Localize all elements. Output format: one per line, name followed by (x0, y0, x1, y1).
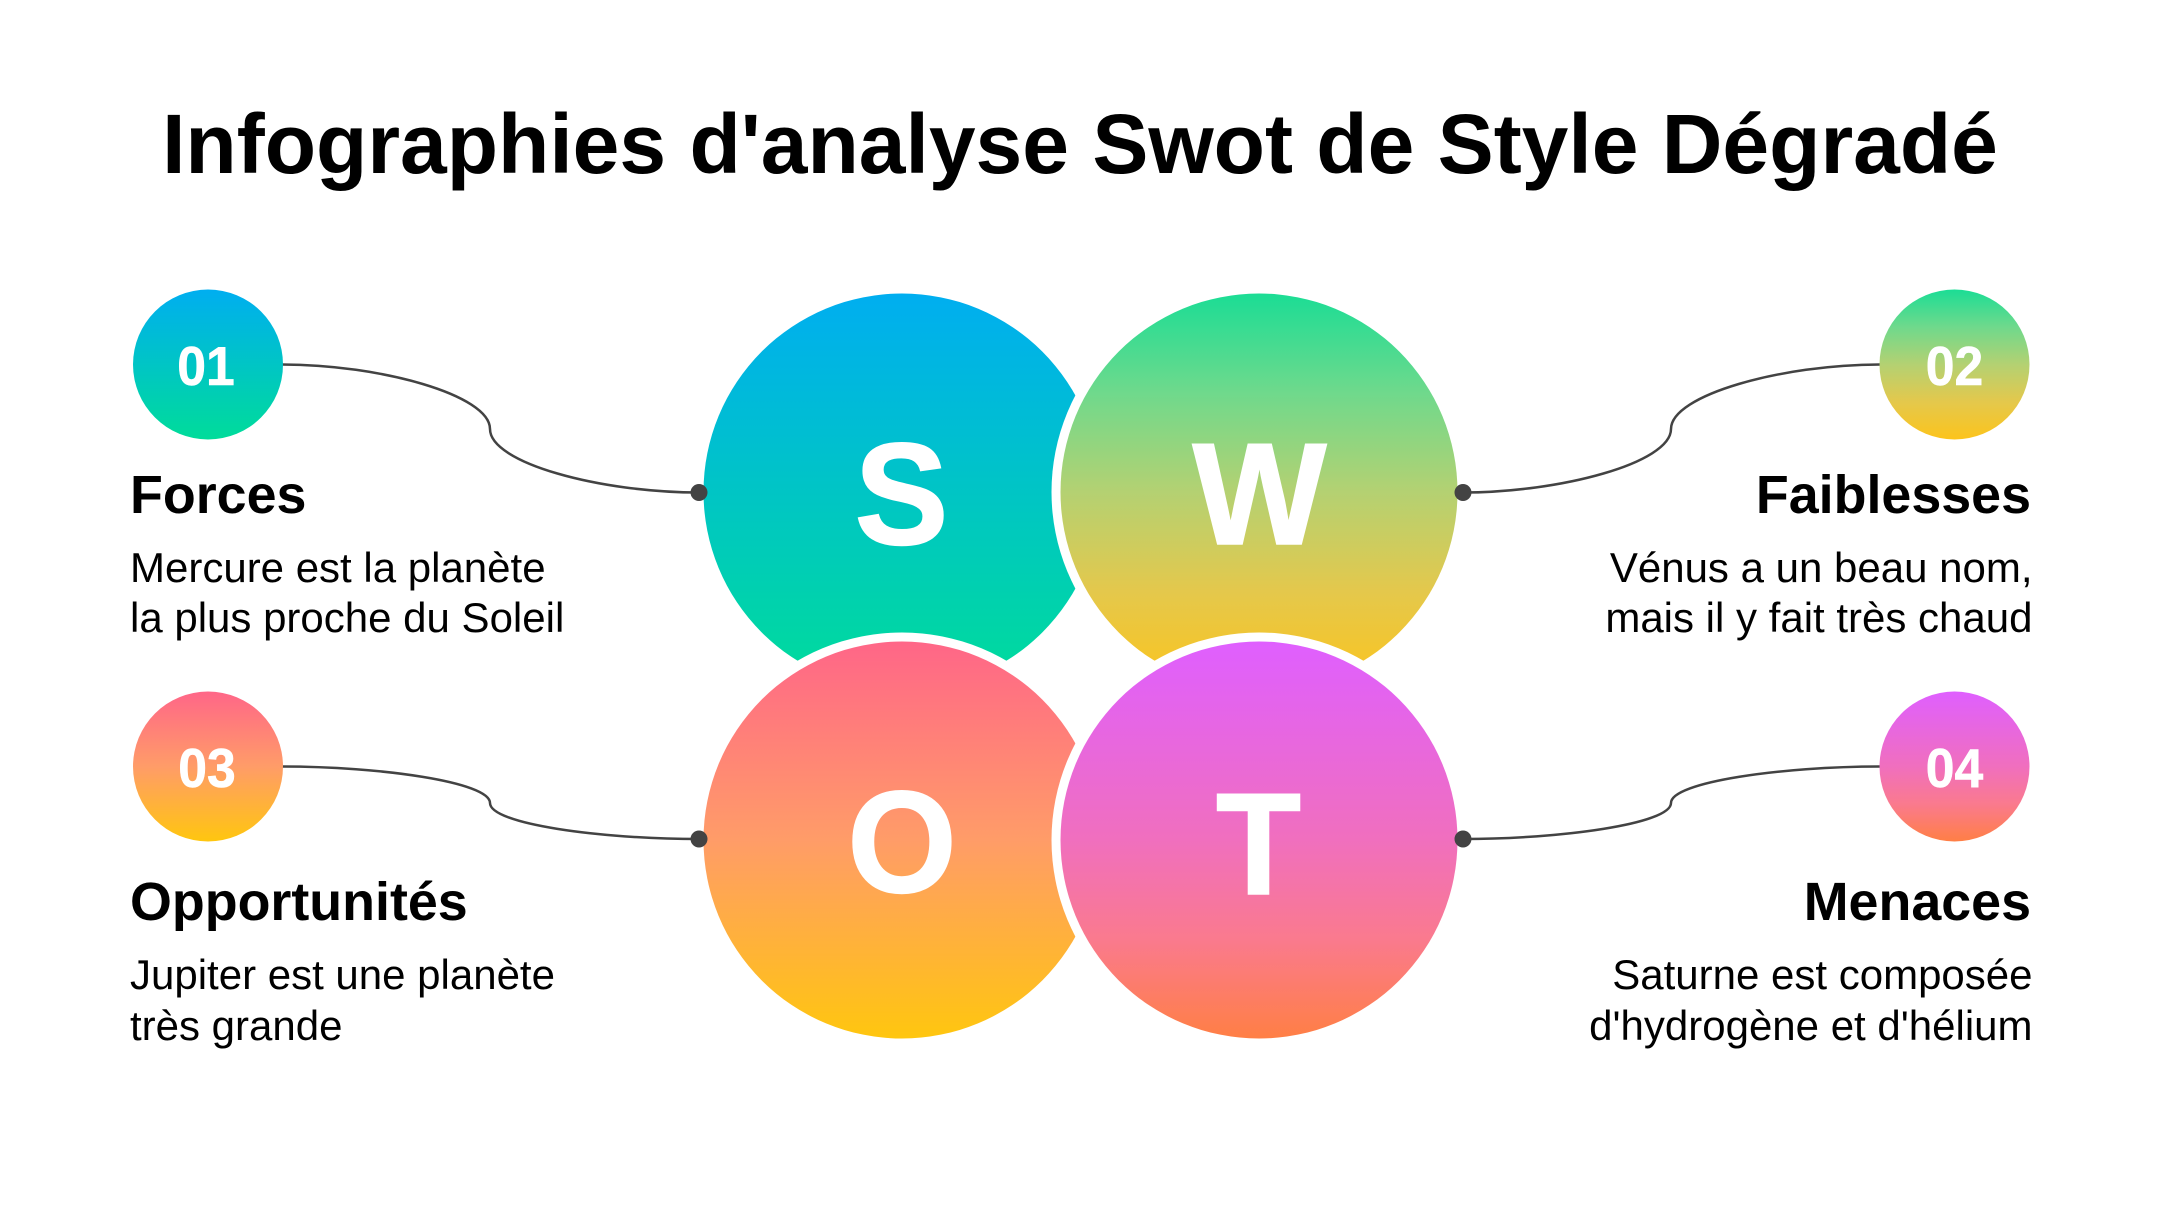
text block: Faiblesses (1605, 465, 2032, 641)
text block: Faiblesses: mais il y fait très chaud (1605, 594, 2032, 641)
number badge 03 (133, 692, 283, 842)
text block: Forces: la plus proche du Soleil (130, 594, 564, 641)
text block: Opportunités (130, 872, 555, 1049)
text block: Forces (130, 465, 564, 641)
number badge 01 (133, 290, 283, 440)
text block: Forces: Mercure est la planète (130, 544, 546, 591)
text block: Opportunités: très grande (130, 1002, 342, 1049)
number badge 02 (1880, 290, 2030, 440)
SWOT circle T: T (1216, 763, 1301, 926)
text block: Menaces: Menaces (1804, 872, 2031, 932)
title: Infographies d'analyse Swot de Style Dégradé (162, 97, 1998, 191)
connector 03 to O (282, 766, 708, 848)
text block: Menaces: Saturne est composée (1612, 951, 2032, 998)
text block: Faiblesses: Faiblesses (1756, 465, 2031, 525)
text block: Opportunités: Opportunités (130, 872, 468, 932)
number badge 01: 01 (177, 337, 235, 397)
text block: Faiblesses: Vénus a un beau nom, (1610, 544, 2032, 591)
number badge 03: 03 (178, 739, 236, 799)
text block: Menaces (1589, 872, 2032, 1049)
text block: Forces: Forces (130, 465, 306, 525)
connector 04 to T (1454, 766, 1880, 848)
connector 01 to S (282, 364, 708, 501)
SWOT circle W (1052, 284, 1466, 700)
SWOT circle S (704, 294, 1100, 690)
SWOT circle S: S (855, 414, 948, 575)
text block: Menaces: d'hydrogène et d'hélium (1589, 1002, 2032, 1049)
text block: Opportunités: Jupiter est une planète (130, 951, 555, 998)
connector 02 to W (1454, 364, 1880, 501)
number badge 02: 02 (1926, 337, 1983, 397)
SWOT circle O (694, 632, 1110, 1048)
SWOT circle T (1052, 632, 1466, 1048)
SWOT circle O: O (847, 762, 957, 923)
number badge 04 (1880, 692, 2030, 842)
SWOT circle W: W (1192, 414, 1327, 575)
number badge 04: 04 (1926, 739, 1984, 799)
